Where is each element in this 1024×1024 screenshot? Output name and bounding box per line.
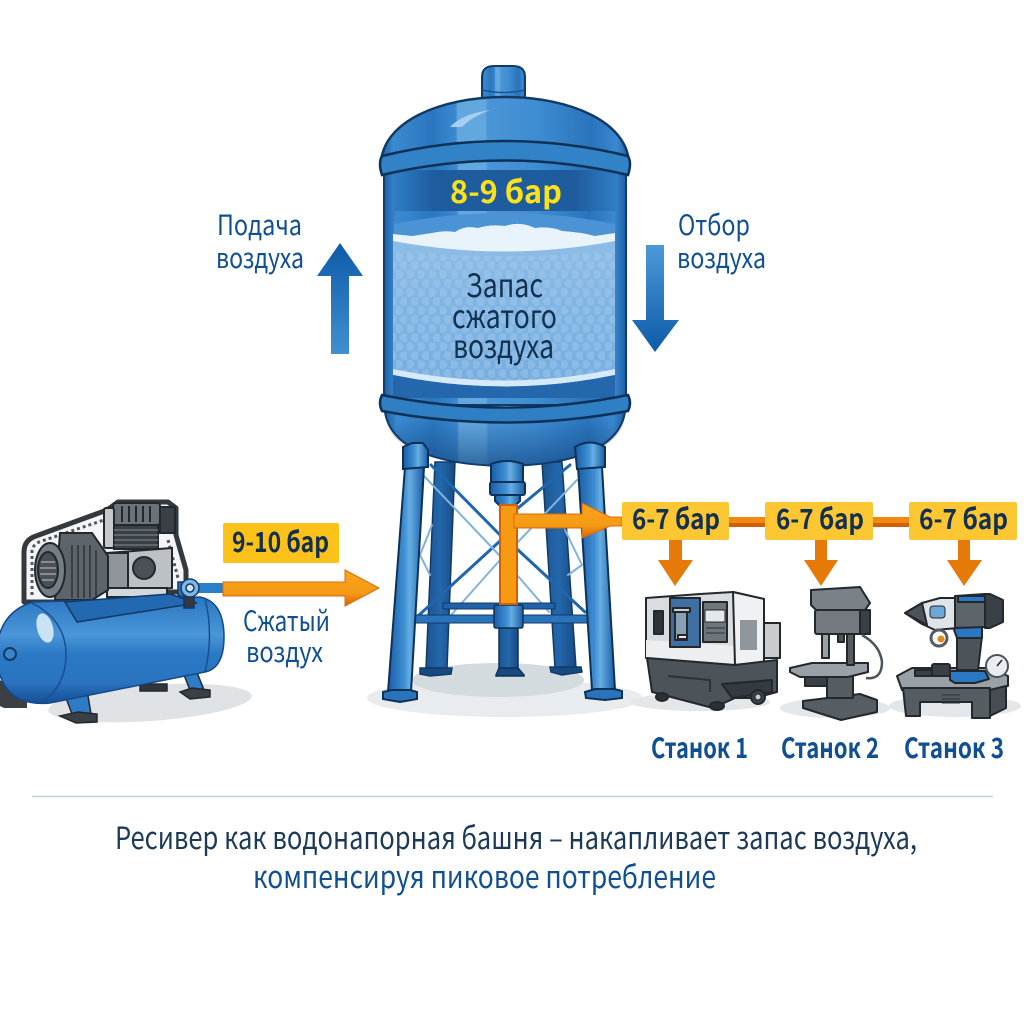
tank highlight <box>33 611 57 645</box>
machine shadows <box>630 693 1021 718</box>
outlet coupling <box>490 461 525 505</box>
label: air supply <box>216 204 304 277</box>
badge: machine 2 pressure: 6-7 бар <box>776 498 864 538</box>
tank seam <box>32 598 210 703</box>
receiver tank <box>380 66 630 505</box>
compressor shadow <box>47 678 253 728</box>
label: air stock: Запас <box>466 261 543 307</box>
outlet pipe orange vertical <box>500 505 517 604</box>
caption: компенсируя пиковое потребление <box>253 852 716 897</box>
body <box>384 160 626 405</box>
badge: machine 3 pressure: 6-7 бар <box>919 498 1008 538</box>
machine 1: CNC lathe <box>646 592 780 710</box>
label: air draw <box>677 204 766 277</box>
outlet valve <box>178 579 224 608</box>
air above liquid <box>394 213 615 240</box>
lower liquid rim <box>393 369 615 386</box>
caption <box>115 813 917 897</box>
badge: machine 1 pressure: 6-7 бар <box>632 498 720 538</box>
machine names: Станок 1 <box>651 727 748 767</box>
top flange <box>380 141 630 175</box>
foam surface <box>393 224 615 252</box>
label: 8-9 bar: 8-9 бар <box>450 167 562 212</box>
hex pattern <box>393 250 615 384</box>
neck <box>482 66 525 100</box>
motor <box>35 533 108 600</box>
central lower column <box>494 605 524 676</box>
label: air stock: воздуха <box>453 322 554 368</box>
compressor <box>0 502 224 723</box>
label: air supply: воздуха <box>216 237 304 277</box>
pump crankcase <box>107 548 172 597</box>
end port <box>4 648 16 660</box>
front left leg <box>383 443 428 702</box>
label: compressed air: воздух <box>246 631 323 671</box>
pump cylinder head <box>104 503 175 549</box>
machine 2: drill press <box>790 587 882 720</box>
receiver tank body <box>0 597 224 703</box>
label: air supply: Подача <box>217 204 302 244</box>
label: air draw: воздуха <box>677 237 766 277</box>
mounting plate <box>65 594 197 622</box>
tower shadow <box>367 663 643 717</box>
arrows to machines <box>658 540 982 586</box>
manifold connectors <box>729 517 909 527</box>
label: air stock <box>452 261 557 368</box>
arrow: down <box>632 245 679 352</box>
outlet arrow to machines <box>514 503 622 538</box>
ring beams <box>415 603 587 623</box>
front right leg <box>575 442 622 700</box>
compressed air fill <box>393 236 615 384</box>
neck collar <box>482 90 525 92</box>
label: air stock: сжатого <box>452 292 557 338</box>
machine names <box>651 727 1004 767</box>
window dark band <box>394 170 616 211</box>
cross bracing <box>418 465 585 616</box>
lower tank band <box>393 375 615 398</box>
machine 3: pneumatic drill on bench <box>897 594 1008 718</box>
label: air draw: Отбор <box>678 204 750 244</box>
bottom dome shading <box>385 420 625 466</box>
label: compressed air: Сжатый <box>243 600 330 640</box>
guard mesh <box>32 520 178 595</box>
guard frame <box>24 502 186 602</box>
bottom dome <box>385 412 625 466</box>
machine names: Станок 2 <box>781 727 879 767</box>
top dome <box>381 97 629 165</box>
front legs <box>383 442 622 702</box>
back foot <box>0 680 27 708</box>
compressed air arrow <box>223 570 379 606</box>
receiver feet <box>60 670 210 723</box>
arrow: up <box>317 243 363 354</box>
badge: 9-10 bar: 9-10 бар <box>232 521 329 561</box>
back legs <box>420 462 582 676</box>
label: compressed air <box>243 600 330 671</box>
dome highlight <box>450 110 490 127</box>
water tower back structure <box>415 462 587 676</box>
bottom flange <box>380 395 630 422</box>
